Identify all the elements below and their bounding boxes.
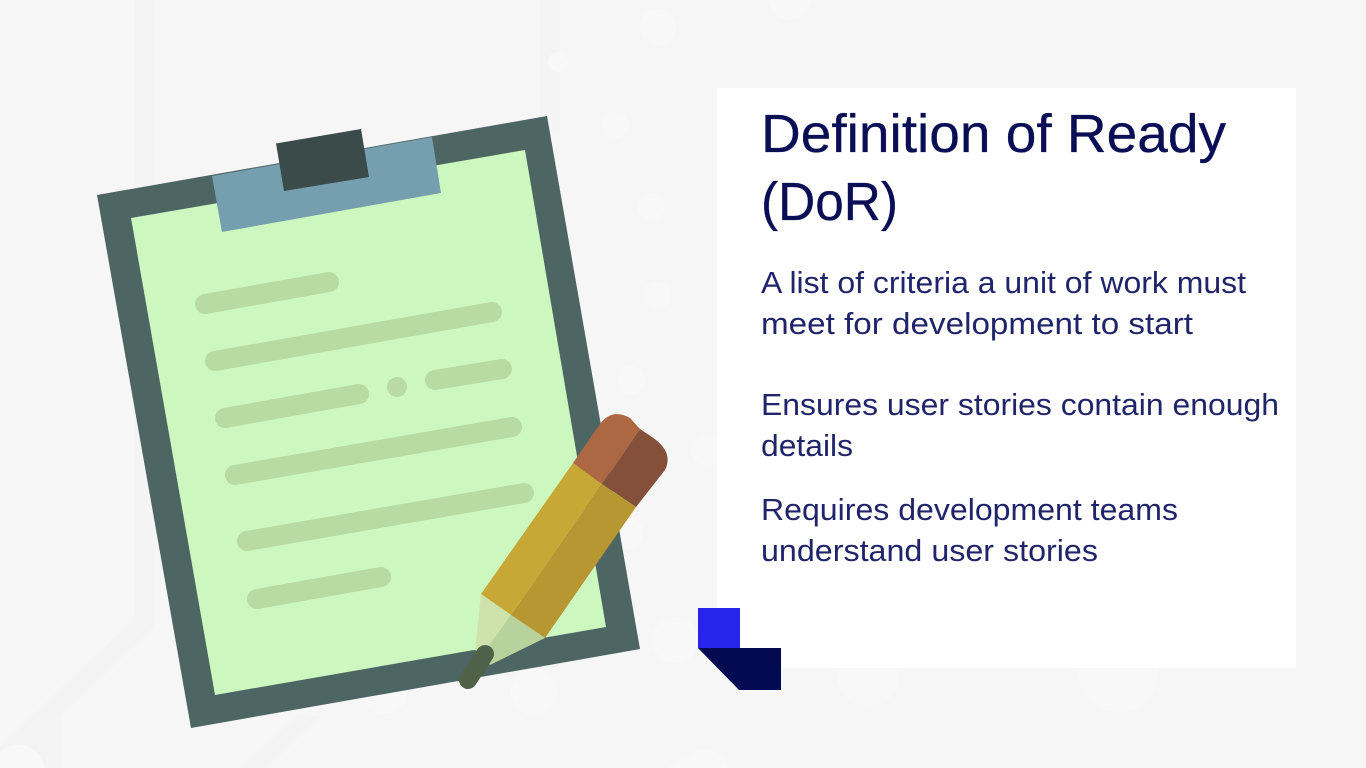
text block: team understanding: Requires development teams [761, 492, 1178, 527]
panel: definition text card [717, 88, 1296, 668]
clipboard board [97, 116, 640, 728]
icon: clipboard [97, 116, 640, 728]
paper text lines [205, 282, 524, 599]
pencil eraser [573, 414, 668, 507]
heading: (DoR) [761, 172, 898, 232]
text block: user story details: details [761, 428, 853, 463]
clipboard clip [212, 137, 441, 232]
text block: team understanding: understand user stories [761, 533, 1098, 568]
heading [761, 104, 1226, 232]
pencil tip [475, 594, 545, 665]
text block: criteria list [761, 265, 1246, 341]
text block: user story details: Ensures user stories contain enough [761, 387, 1279, 422]
text block: team understanding [761, 492, 1178, 568]
text block: criteria list: meet for development to start [761, 306, 1193, 341]
clipboard paper [131, 150, 606, 695]
heading: Definition of Ready [761, 104, 1226, 164]
clipboard clip handle [276, 129, 369, 191]
text block: user story details [761, 387, 1279, 463]
pencil lead [468, 654, 485, 680]
text block: criteria list: A list of criteria a unit of work must [761, 265, 1246, 300]
pencil body [481, 463, 636, 638]
icon: pencil [468, 414, 668, 680]
icon: brand logo [698, 608, 781, 690]
